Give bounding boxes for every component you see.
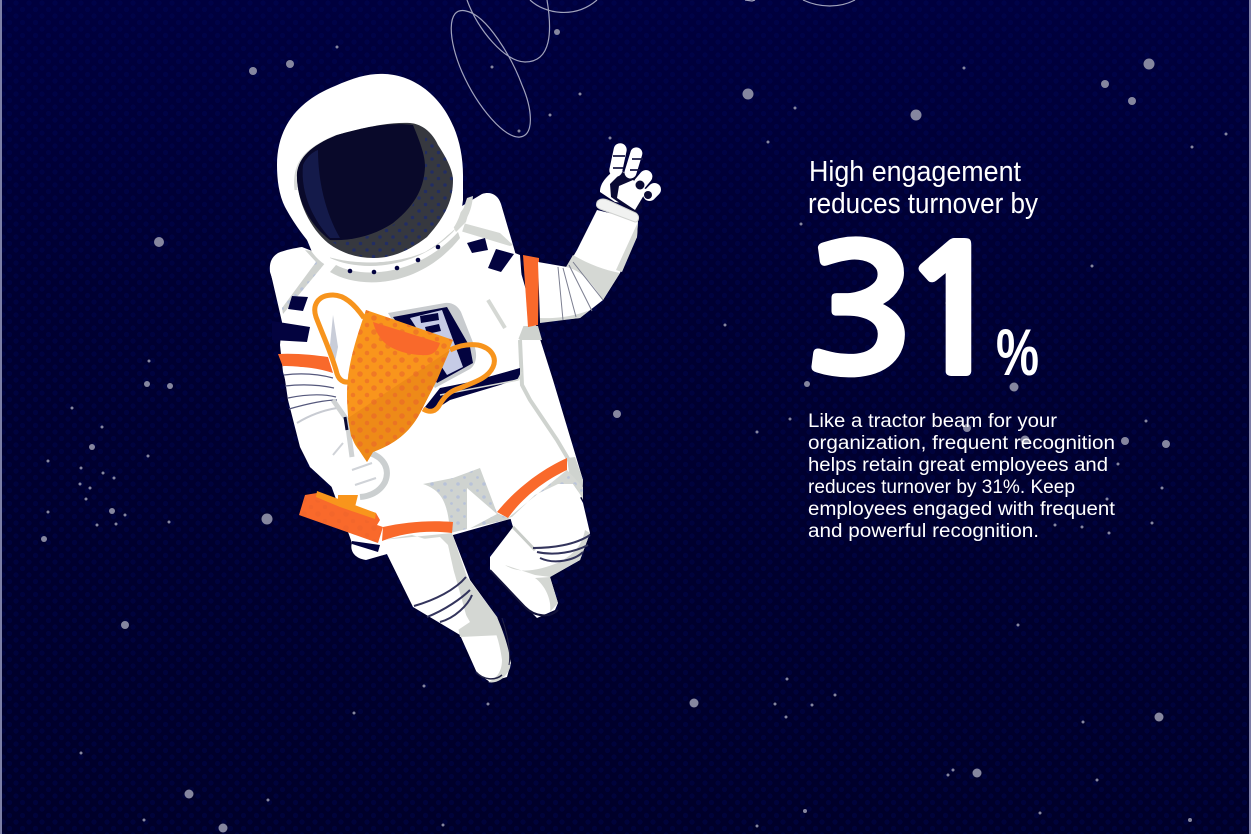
chest control pack — [388, 303, 522, 411]
visor — [297, 123, 453, 258]
left leg — [380, 530, 511, 682]
orange suit bands — [278, 255, 567, 541]
trophy cup — [347, 310, 453, 462]
big number 31%: % — [996, 315, 1039, 389]
body text — [808, 411, 1116, 542]
trophy stem — [338, 495, 358, 507]
backpack — [270, 193, 583, 560]
body text: Like a tractor beam for your — [808, 411, 1058, 432]
body text: and powerful recognition. — [808, 521, 1039, 542]
shoulder stripes — [272, 238, 514, 342]
neck ring — [305, 205, 470, 282]
right glove — [596, 142, 664, 222]
right leg — [490, 470, 590, 618]
right arm — [538, 210, 638, 323]
trophy inner rim — [373, 322, 440, 355]
helmet — [277, 74, 463, 262]
body text: organization, frequent recognition — [808, 433, 1115, 454]
trophy — [299, 295, 494, 552]
heading: reduces turnover by — [808, 188, 1039, 220]
body text: reduces turnover by 31%. Keep — [808, 477, 1075, 498]
heading — [808, 156, 1039, 220]
tether loops — [451, 0, 855, 137]
crotch folds — [423, 468, 510, 533]
trophy base — [299, 493, 383, 543]
body text: employees engaged with frequent — [808, 499, 1116, 520]
body text: helps retain great employees and — [808, 455, 1108, 476]
torso and shoulders — [270, 240, 570, 530]
left arm and glove — [283, 315, 387, 497]
big number 31%: 31 — [803, 227, 1011, 400]
neck ring bolts — [348, 245, 440, 274]
heading: High engagement — [809, 156, 1021, 188]
astronaut — [270, 74, 664, 682]
trophy handles — [315, 295, 494, 411]
